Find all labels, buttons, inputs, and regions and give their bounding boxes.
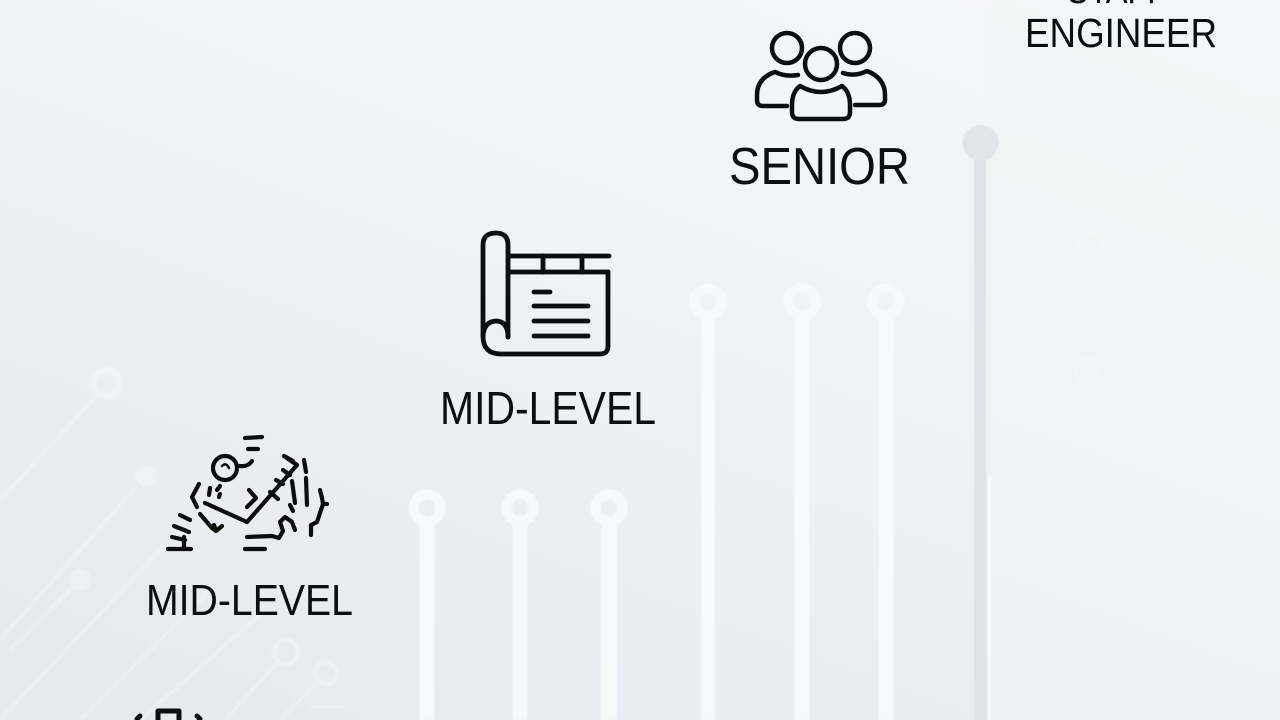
- icon: blueprint scroll: [483, 233, 609, 354]
- label: second mid-level: MID-LEVEL: [440, 382, 656, 434]
- grey pillar: staff engineer: [962, 125, 998, 720]
- white pillars: senior group: [694, 288, 900, 720]
- label: first mid-level: MID-LEVEL: [146, 576, 353, 625]
- background circuit traces: lower left: [0, 370, 345, 720]
- label: staff engineer (top line cropped): ENGINEER: [1025, 10, 1217, 56]
- icon: team of three people: [757, 33, 885, 119]
- icon: gear (cropped at bottom edge): [137, 711, 200, 720]
- icon: drafting compass and ruler: [168, 437, 327, 549]
- background circuit traces: upper right: [500, 0, 1280, 382]
- label: senior: SENIOR: [729, 138, 910, 196]
- white pillars: mid-level group: [414, 494, 622, 720]
